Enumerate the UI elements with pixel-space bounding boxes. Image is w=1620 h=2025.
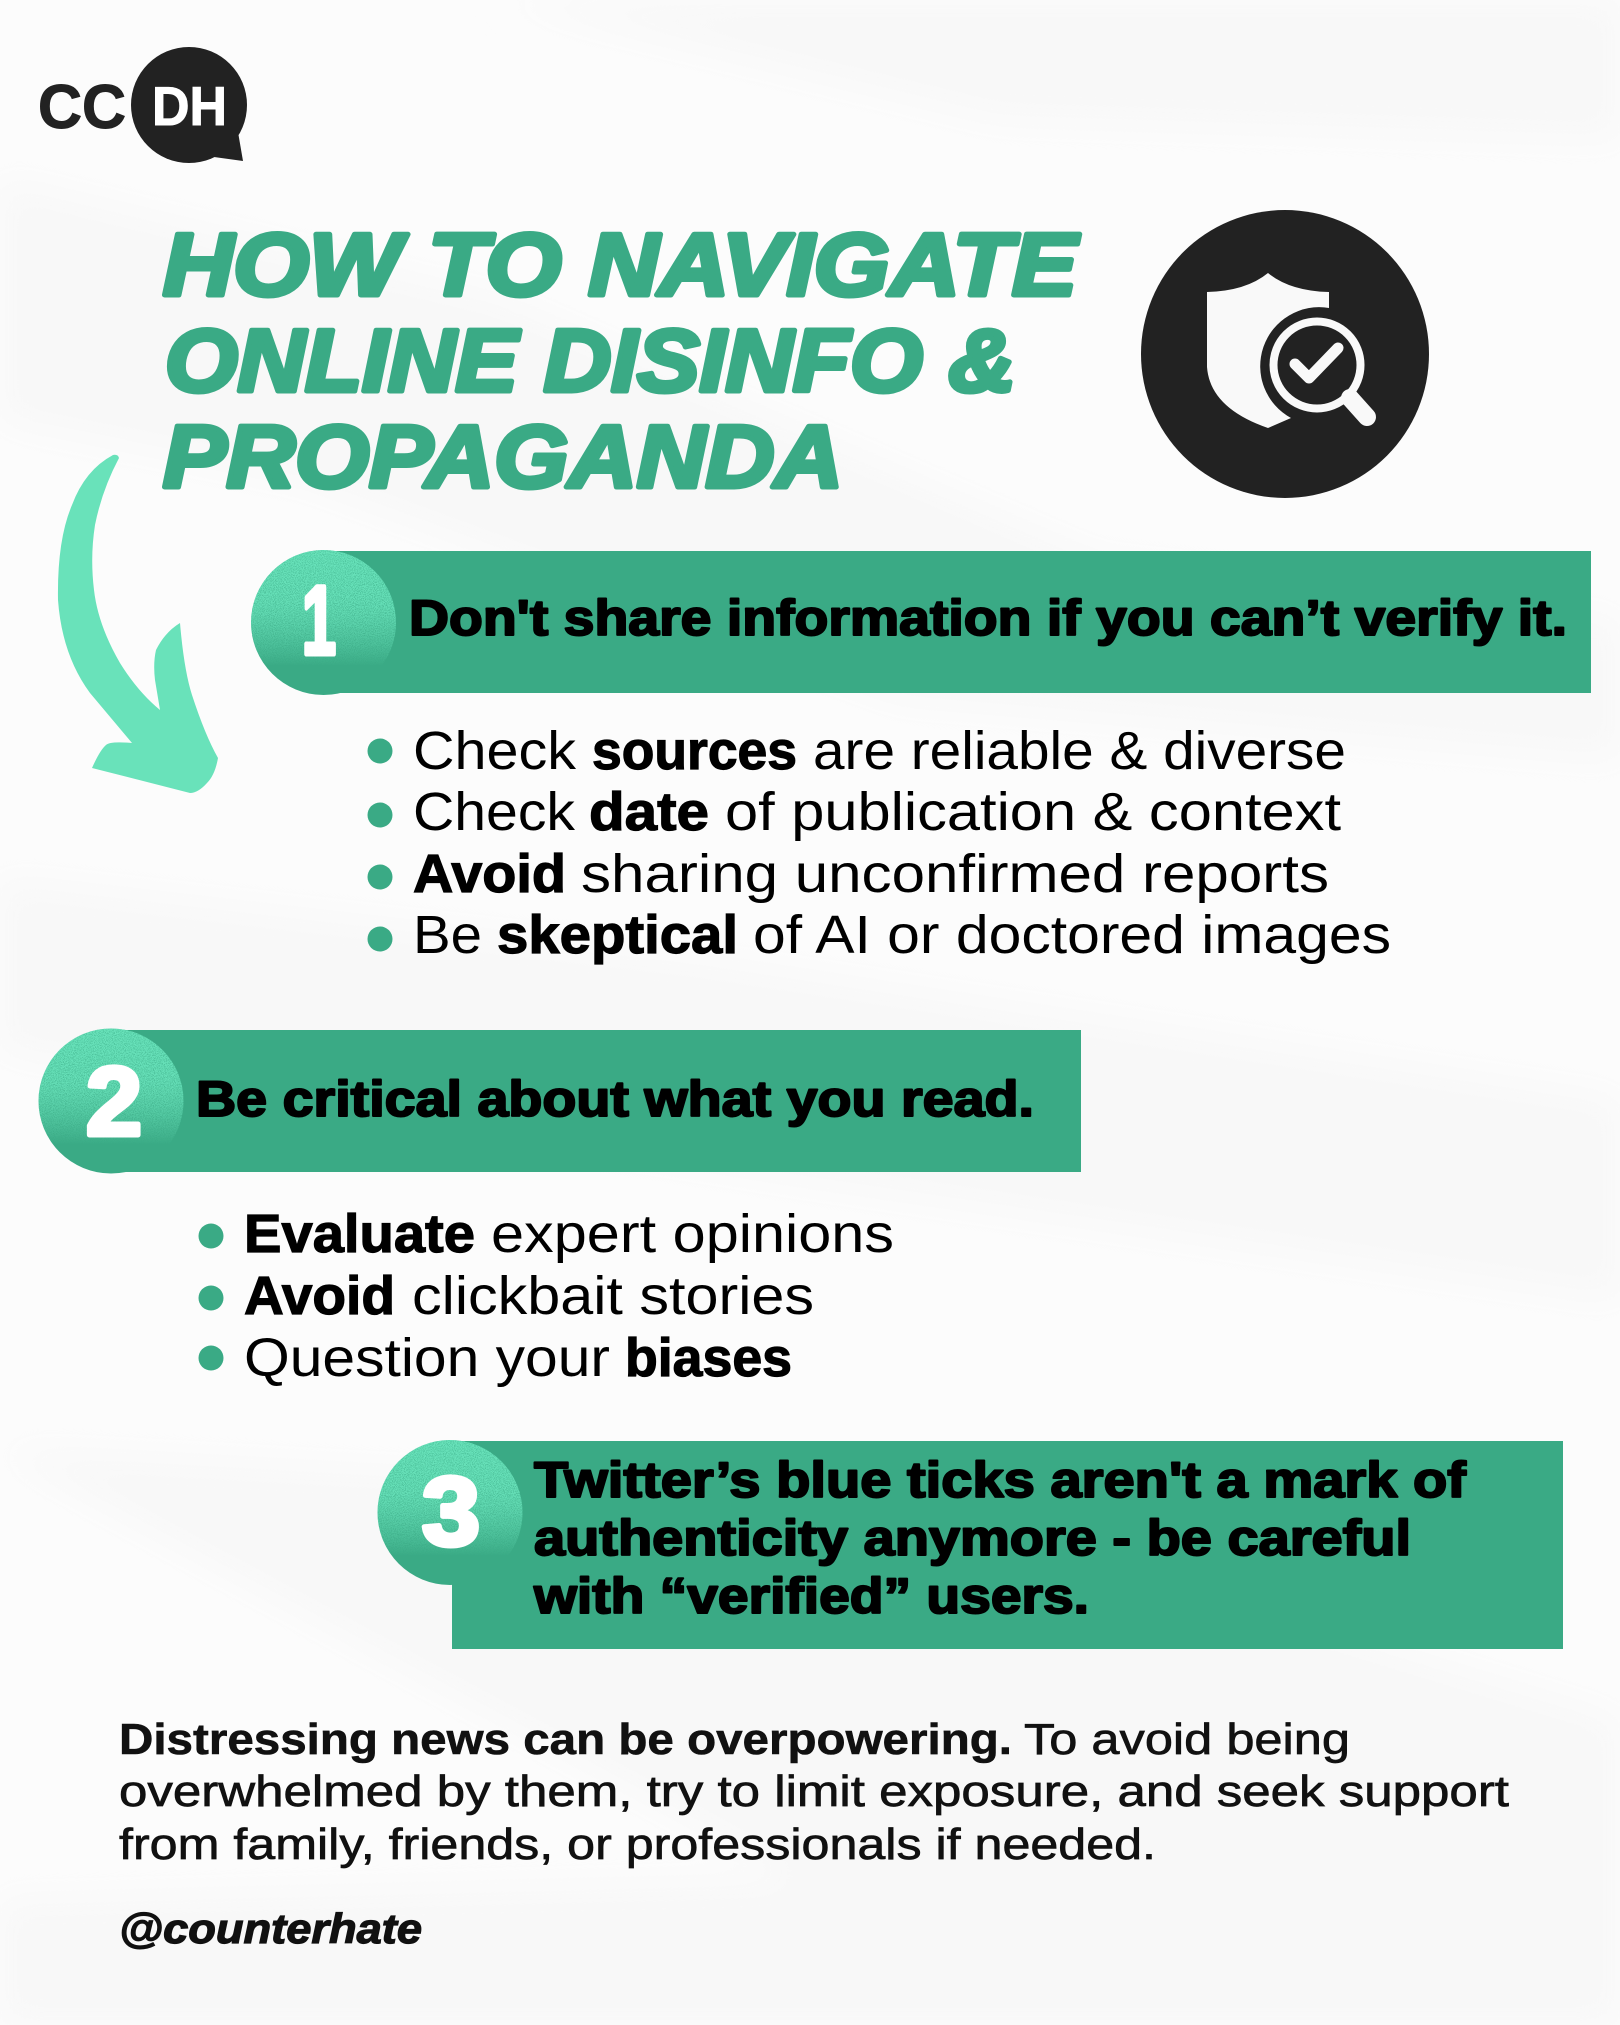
closing note: Distressing news can be overpowering. [119, 1715, 1012, 1764]
step 2 heading text: Be critical about what you read. [196, 1071, 1034, 1127]
step 2 bullet list: Avoid [244, 1266, 395, 1326]
closing note: overwhelmed by them, try to limit exposure, and seek support [119, 1767, 1509, 1816]
step 1 bullet list: Avoid [413, 844, 566, 904]
step 3 heading bar [378, 1440, 1563, 1649]
step 1 bullet list: Check [413, 782, 576, 842]
step 1 heading text: Don't share information if you can’t verify it. [409, 590, 1567, 646]
step 3 heading text [533, 1452, 1466, 1624]
step 2 heading bar [38, 1028, 1081, 1174]
logo: CCDH: DH [152, 75, 227, 137]
step 2 bullet list: expert opinions [491, 1204, 894, 1264]
step 2 bullet list [198, 1204, 894, 1388]
step 2 bullet list: biases [625, 1328, 792, 1388]
step 3 heading text: authenticity anymore - be careful [534, 1510, 1411, 1566]
step 1 bullet list: of publication & context [725, 782, 1341, 842]
title: PROPAGANDA [163, 407, 843, 506]
step 1 bullet list: of AI or doctored images [753, 905, 1391, 965]
handle: @counterhate: @counterhate [119, 1905, 422, 1952]
step 2 bullet list: Question your [244, 1328, 610, 1388]
number badge 2 [38, 1028, 184, 1174]
step 2 bullet list: Evaluate [244, 1204, 475, 1264]
step 1 bullet list [368, 721, 1391, 965]
closing note: To avoid being [1024, 1715, 1350, 1764]
step 1 bullet list: sources [592, 721, 797, 781]
step 1 bullet list: skeptical [497, 905, 738, 965]
logo: CCDH [38, 47, 247, 163]
number badge 1: 1 [302, 566, 336, 675]
step 1 bullet list: date [589, 782, 709, 842]
closing note: from family, friends, or professionals if needed. [119, 1820, 1156, 1869]
title [163, 215, 1080, 506]
number badge 3 [378, 1440, 522, 1585]
icon: shield with magnifying glass [1141, 210, 1429, 498]
step 1 bullet list: Be [413, 905, 482, 965]
number badge 1 [251, 550, 396, 695]
title: HOW TO NAVIGATE [163, 215, 1080, 314]
step 1 bullet list: sharing unconfirmed reports [581, 844, 1329, 904]
step 3 heading text: Twitter’s blue ticks aren't a mark of [534, 1452, 1466, 1508]
step 3 heading text: with “verified” users. [533, 1568, 1089, 1624]
step 2 bullet list: clickbait stories [412, 1266, 814, 1326]
closing note [119, 1715, 1509, 1869]
step 1 bullet list: are reliable & diverse [813, 721, 1346, 781]
title: ONLINE DISINFO & [165, 311, 1016, 410]
step 1 heading bar [251, 550, 1591, 695]
number badge 2: 2 [86, 1047, 142, 1156]
logo: CCDH: CC [38, 73, 126, 142]
arrow [58, 455, 218, 793]
number badge 3: 3 [422, 1457, 480, 1566]
step 1 bullet list: Check [413, 721, 577, 781]
